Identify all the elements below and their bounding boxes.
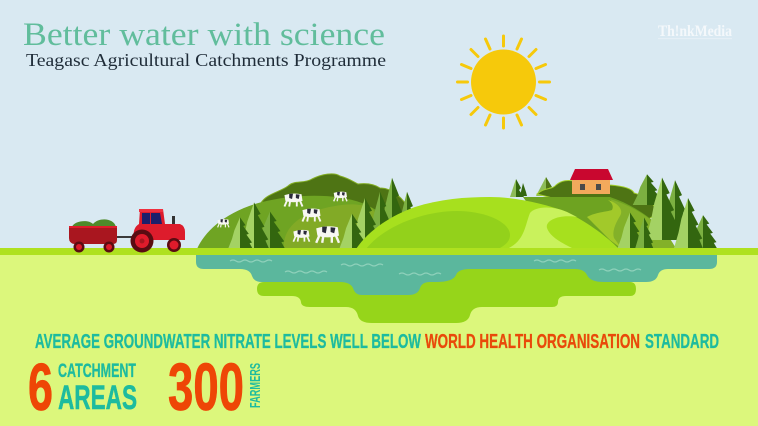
right hill with house [356,169,717,249]
main bright hill [356,197,619,249]
hitch [117,236,132,238]
logo: Th!nkMedia [658,23,732,40]
front trees [617,212,644,249]
back hill [523,197,676,249]
headline: AVERAGE GROUNDWATER NITRATE LEVELS WELL BELOW [35,331,421,353]
house [570,169,613,194]
winding path [587,200,622,249]
stat: 6 catchment areas [28,350,137,425]
cows [284,193,302,207]
tractor and trailer [69,209,185,252]
ground band [0,248,758,255]
tractor body [134,209,185,240]
back hill lighter slope [610,199,676,249]
stat: 6 catchment areas: AREAS [58,379,137,417]
hill patch [284,204,400,249]
sky background [0,0,758,249]
trees [394,192,421,249]
hill body [197,196,415,249]
light path [507,208,577,249]
water body [196,255,717,295]
trailer load [72,219,116,227]
stat: 6 catchment areas: CATCHMENT [58,360,136,382]
ground [0,249,758,426]
exhaust [172,216,175,225]
headline: STANDARD [645,331,719,353]
cab window [142,213,162,224]
trailer [69,226,117,244]
small back trees [510,179,516,197]
water ripples [230,260,641,275]
dark bushes [537,180,657,224]
stat: 300 farmers: 300 [168,350,244,425]
big trees [633,174,662,205]
hill patch [366,211,510,249]
headline: WORLD HEALTH ORGANISATION [425,331,640,353]
subtitle: Teagasc Agricultural Catchments Programme [26,50,386,70]
stat: 300 farmers: FARMERS [247,363,264,408]
title: Better water with science [23,17,385,53]
tractor wheels [130,230,154,252]
dark bushes [261,174,410,225]
icon: sun [458,36,550,128]
stat: 6 catchment areas: 6 [28,350,53,425]
trailer wheels [74,242,84,252]
deep green aquifer [257,269,636,323]
left hill with cows [197,174,421,249]
